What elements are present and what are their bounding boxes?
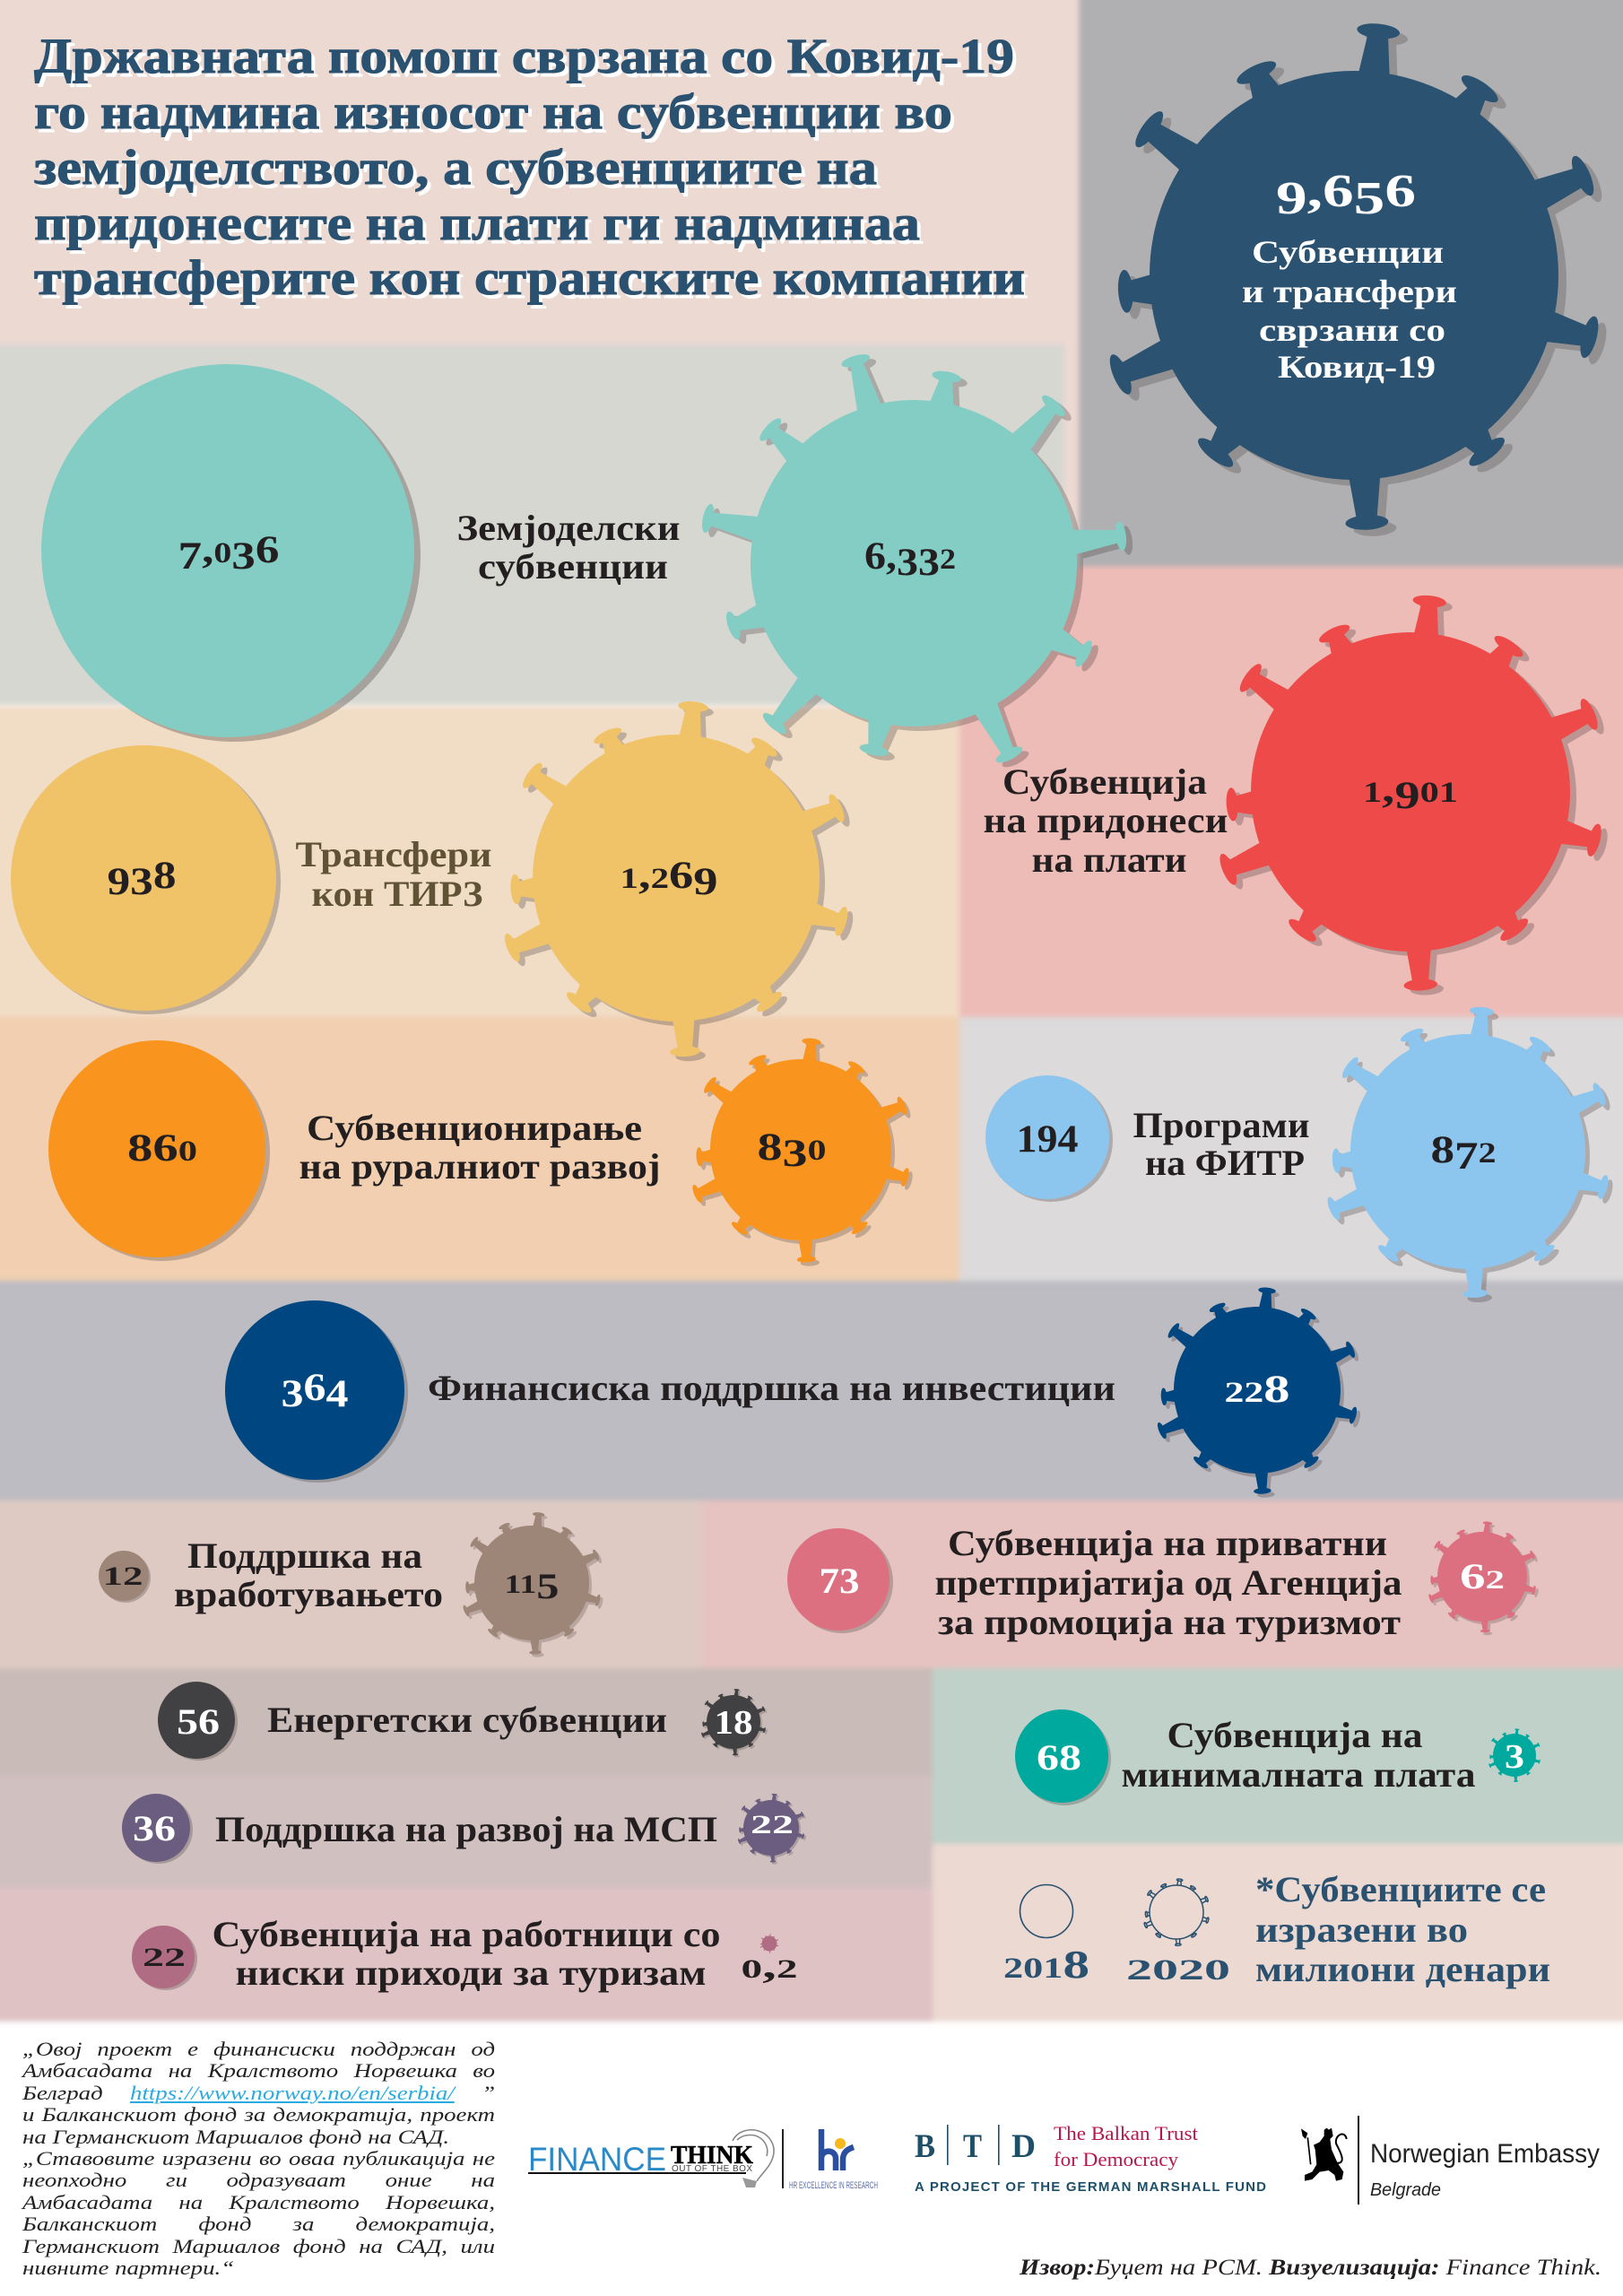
logo: HR Excellence in Research [789,2129,878,2191]
virus 2020: 0,2: 0,2 [741,1945,798,1986]
label: agricultural subsidies: Земјоделски [457,508,680,548]
title: придонесите на плати ги надминаа [34,196,920,250]
virus 2020: 872: 7 [1454,1135,1479,1178]
circle 2018: 36 [122,1794,193,1864]
legend: 2020 virus outline: 2020 [1126,1954,1230,1987]
row: FITR programmes [985,1006,1615,1303]
disclaimer text: на Германскиот Маршалов фонд на САД. [22,2126,449,2148]
title [34,29,1028,309]
circle 2018: 7,036: 7 [178,535,202,578]
disclaimer text: Германскиот Маршалов фонд на САД, или [22,2235,495,2257]
disclaimer text: Амбасадата на Кралството Норвешка, [22,2191,495,2213]
source line: Извор: Буџет на РСМ. Визуелизација: Finance Think. [1019,2256,1601,2280]
panel: legend [933,1844,1623,2022]
logo: Norwegian Embassy [1301,2116,1600,2205]
circle 2018: 194: 194 [1017,1118,1078,1161]
virus 2020: 0,2 [741,1934,798,1986]
virus 2020: 1,901: 01 [1420,776,1458,808]
total label: Субвенции [1252,234,1444,270]
logo: Balkan Trust for Democracy: T [963,2128,982,2165]
row: minimum wage [1015,1709,1541,1805]
logo: Balkan Trust for Democracy: B [915,2128,935,2165]
label: transfers to FDI: кон ТИРЗ [312,874,482,914]
circle 2018: 12 [99,1551,151,1603]
logo: Finance Think: FINANCE [528,2141,666,2178]
label: tourism promotion [934,1523,1402,1642]
label: minimum wage: минималната плата [1121,1754,1476,1795]
logo: HR Excellence in Research: HR EXCELLENCE IN RESEARCH [789,2180,878,2191]
virus 2020: 872: 2 [1479,1136,1496,1169]
label: agricultural subsidies: субвенции [478,546,668,587]
circle 2018: 22: 22 [143,1943,186,1972]
label: employment support [174,1535,443,1614]
virus 2020: 1,901: 9 [1394,775,1420,817]
row: wage contributions [983,594,1610,996]
label: transfers to FDI: Трансфери [296,834,491,874]
virus 2020: 3: 3 [1505,1738,1524,1776]
legend [1003,1869,1550,1989]
panel: agricultural subsidies [0,344,1064,705]
title: земјоделството, а субвенциите на [34,140,877,195]
label: tourism promotion: за промоција на туризмот [938,1602,1401,1642]
logo: Balkan Trust for Democracy: for Democracy [1054,2148,1178,2170]
panel: FITR programmes [959,1017,1623,1281]
label: wage contributions: на плати [1031,839,1187,880]
disclaimer text: Балканскиот фонд за демократија, [22,2213,495,2235]
logo: Balkan Trust for Democracy [915,2122,1266,2195]
virus 2020: 3 [1488,1728,1541,1782]
virus 2020: 6,332 [699,352,1134,770]
circle 2018: 938: 8 [153,855,176,897]
legend: 2018 circle: 201 8 [1003,1943,1089,1987]
logo: Finance Think [528,2130,774,2187]
legend: 2020 virus outline [1126,1879,1230,1987]
label: transfers to FDI [296,834,491,914]
panel: title [0,0,1079,574]
row: rural development [48,1038,914,1266]
row: energy subsidies [158,1682,768,1761]
label: energy subsidies: Енергетски субвенции [267,1700,667,1740]
circle 2018: 68 [1015,1709,1111,1805]
circle 2018: 860 [48,1040,270,1261]
panel: low-income tourism workers [0,1888,933,2022]
disclaimer text: и Балканскиот фонд за демократија, проект [22,2103,495,2126]
virus 2020: 830: 3 [782,1133,807,1175]
title: придонесите на плати ги надминаа [38,199,924,254]
label: wage contributions: Субвенција [1002,761,1207,802]
virus 2020: 1,901: 1, [1363,769,1392,811]
label: employment support: вработувањето [174,1574,443,1614]
row: employment support [99,1512,604,1657]
virus 2020: 62: 6 2 [1460,1556,1505,1596]
circle 2018: 56 [158,1682,238,1761]
virus 2020: 830: 8 [757,1126,777,1169]
title: го надмина износот на субвенции во [34,84,952,139]
label: investment support: Финансиска поддршка на инвестиции [428,1368,1115,1408]
virus 2020: 22 [737,1794,807,1865]
disclaimer text: „Ставовите изразени во оваа публикација не [22,2147,495,2170]
virus 2020: 6,332: 33 [897,542,940,584]
total value: 6 [1384,166,1416,217]
circle 2018: 364: 6 [303,1367,326,1409]
panel: rural development [0,1017,959,1281]
divider line [782,2129,784,2188]
virus 2020: 872 [1325,1006,1615,1303]
label: tourism promotion: Субвенција на приватни [948,1523,1387,1563]
label: tourism promotion: претпријатија од Агенција [934,1562,1402,1603]
logo: Balkan Trust for Democracy: D [1011,2128,1036,2165]
panel: transfers to FDI [0,707,959,1017]
label: low-income tourism workers: Субвенција на работници со [212,1914,721,1954]
circle 2018: 73: 73 [820,1561,859,1601]
virus 2020: 22: 22 [751,1810,794,1839]
circle 2018: 68: 68 [1037,1737,1081,1778]
circle 2018: 364: 3 [282,1373,303,1415]
total value: 9 [1276,173,1307,224]
virus 2020: 872: 8 [1431,1129,1450,1171]
logo: Finance Think: OUT OF THE BOX [672,2164,752,2174]
circle 2018: 7,036 [41,364,421,742]
title: Државната помош сврзана со Ковид-19 [34,29,1014,83]
circle 2018: 7,036: 0 [213,536,231,569]
legend note [1255,1869,1550,1989]
virus 2020: 6,332: 2 [940,543,956,575]
label: employment support: Поддршка на [187,1535,422,1576]
title: го надмина износот на субвенции во [38,88,956,143]
virus 2020: 115: 5 [536,1566,560,1606]
circle 2018: 7,036: 3 [231,535,256,578]
disclaimer text: Амбасадата на Кралството Норвешка во [22,2059,495,2082]
total label [1242,234,1457,385]
virus 2020: 228 [1156,1287,1362,1498]
circle 2018: 12: 12 [102,1561,143,1591]
panel: investment support [0,1281,1623,1500]
disclaimer text: неопходно ги одразуваат оние на [22,2169,495,2191]
legend note: изразени во [1255,1909,1468,1950]
label: minimum wage [1121,1715,1476,1795]
row: agricultural subsidies [41,352,1134,770]
virus 2020: 6,332: 6, [864,535,893,578]
logo: Balkan Trust for Democracy: A PROJECT OF THE GERMAN MARSHALL FUND [915,2179,1266,2195]
label: FITR programmes [1133,1105,1309,1183]
title: земјоделството, а субвенциите на [38,144,881,198]
row: investment support [225,1287,1362,1498]
total value: ,6 [1307,166,1354,217]
label: wage contributions [983,761,1228,880]
label: rural development: Субвенционирање [307,1108,642,1148]
total label: и трансфери [1242,274,1457,309]
panel: SME support [0,1776,933,1888]
circle 2018: 56: 56 [177,1701,220,1742]
circle 2018: 364 [225,1300,408,1483]
panel: employment support [0,1500,702,1668]
label: rural development [299,1108,660,1187]
circle 2018: 73 [787,1528,893,1633]
disclaimer text: Белград https://www.norway.no/en/serbia/ ” [22,2082,495,2104]
label: wage contributions: на придонеси [983,800,1228,840]
circle 2018: 194 [985,1075,1113,1202]
total label: сврзани со [1259,312,1445,348]
panel: minimum wage [933,1668,1623,1844]
label: agricultural subsidies [457,508,680,587]
icon: Norwegian lion [1301,2128,1347,2181]
virus 2020: 18: 18 [714,1704,753,1742]
row: low-income tourism workers [132,1914,798,1993]
label: FITR programmes: Програми [1133,1105,1309,1145]
circle 2018: 860: 86 0 [127,1127,197,1170]
title: трансферите кон странските компании [38,254,1028,309]
label: SME support: Поддршка на развој на МСП [215,1809,717,1849]
circle 2018: 22 [132,1926,197,1990]
circle 2018: 938 [11,745,281,1014]
label: low-income tourism workers [212,1914,721,1993]
virus 2020: 1,269: 9 [693,861,717,903]
virus 2020: 1,269 [502,700,855,1062]
virus 2020: 1,269: 1,26 [621,855,689,897]
circle 2018: 7,036: , [202,529,213,571]
label: minimum wage: Субвенција на [1167,1715,1422,1755]
disclaimer text: „Овој проект е финансиски поддржан од [22,2038,495,2060]
logo: Balkan Trust for Democracy: The Balkan Trust [1054,2122,1198,2144]
circle 2018: 938: 93 [108,861,153,903]
label: FITR programmes: на ФИТР [1145,1143,1305,1183]
virus 2020: 1,901 [1217,594,1610,996]
disclaimer text [22,2038,495,2279]
circle 2018: 7,036: 6 [256,529,280,571]
total value: 5 [1354,173,1384,224]
circle 2018: 364: 4 [326,1373,348,1415]
logo: Norwegian Embassy: Belgrade [1370,2180,1441,2200]
panel: total [1079,0,1623,567]
panel: energy subsidies [0,1668,933,1776]
row: SME support [122,1794,807,1865]
label: low-income tourism workers: ниски приходи за туризам [235,1952,707,1993]
title: трансферите кон странските компании [34,250,1025,305]
panel: wage contributions [959,567,1623,1017]
circle 2018: 36: 36 [133,1808,176,1848]
total virus: 9,656 [1106,22,1610,537]
legend note: *Субвенциите се [1255,1869,1546,1909]
row: transfers to FDI [11,700,855,1062]
legend: 2018 circle [1003,1885,1089,1987]
virus 2020: 115: 11 [504,1570,536,1599]
virus 2020: 830: 0 [807,1134,827,1166]
virus 2020: 18 [701,1689,768,1757]
disclaimer text: нивните партнери.“ [22,2257,234,2279]
virus 2020: 115 [462,1512,604,1657]
row: tourism promotion [787,1521,1540,1642]
virus 2020: 830 [690,1038,914,1266]
logo: Finance Think: THINK [671,2142,753,2170]
total label: Ковид-19 [1278,349,1436,385]
virus 2020: 228: 22 8 [1225,1369,1289,1411]
label: rural development: на руралниот развој [299,1146,660,1187]
panel: tourism promotion [702,1500,1623,1668]
legend note: милиони денари [1255,1949,1550,1989]
logo: Norwegian Embassy: Norwegian Embassy [1370,2139,1600,2169]
title: Државната помош сврзана со Ковид-19 [38,32,1018,87]
virus 2020: 62 [1428,1521,1540,1635]
